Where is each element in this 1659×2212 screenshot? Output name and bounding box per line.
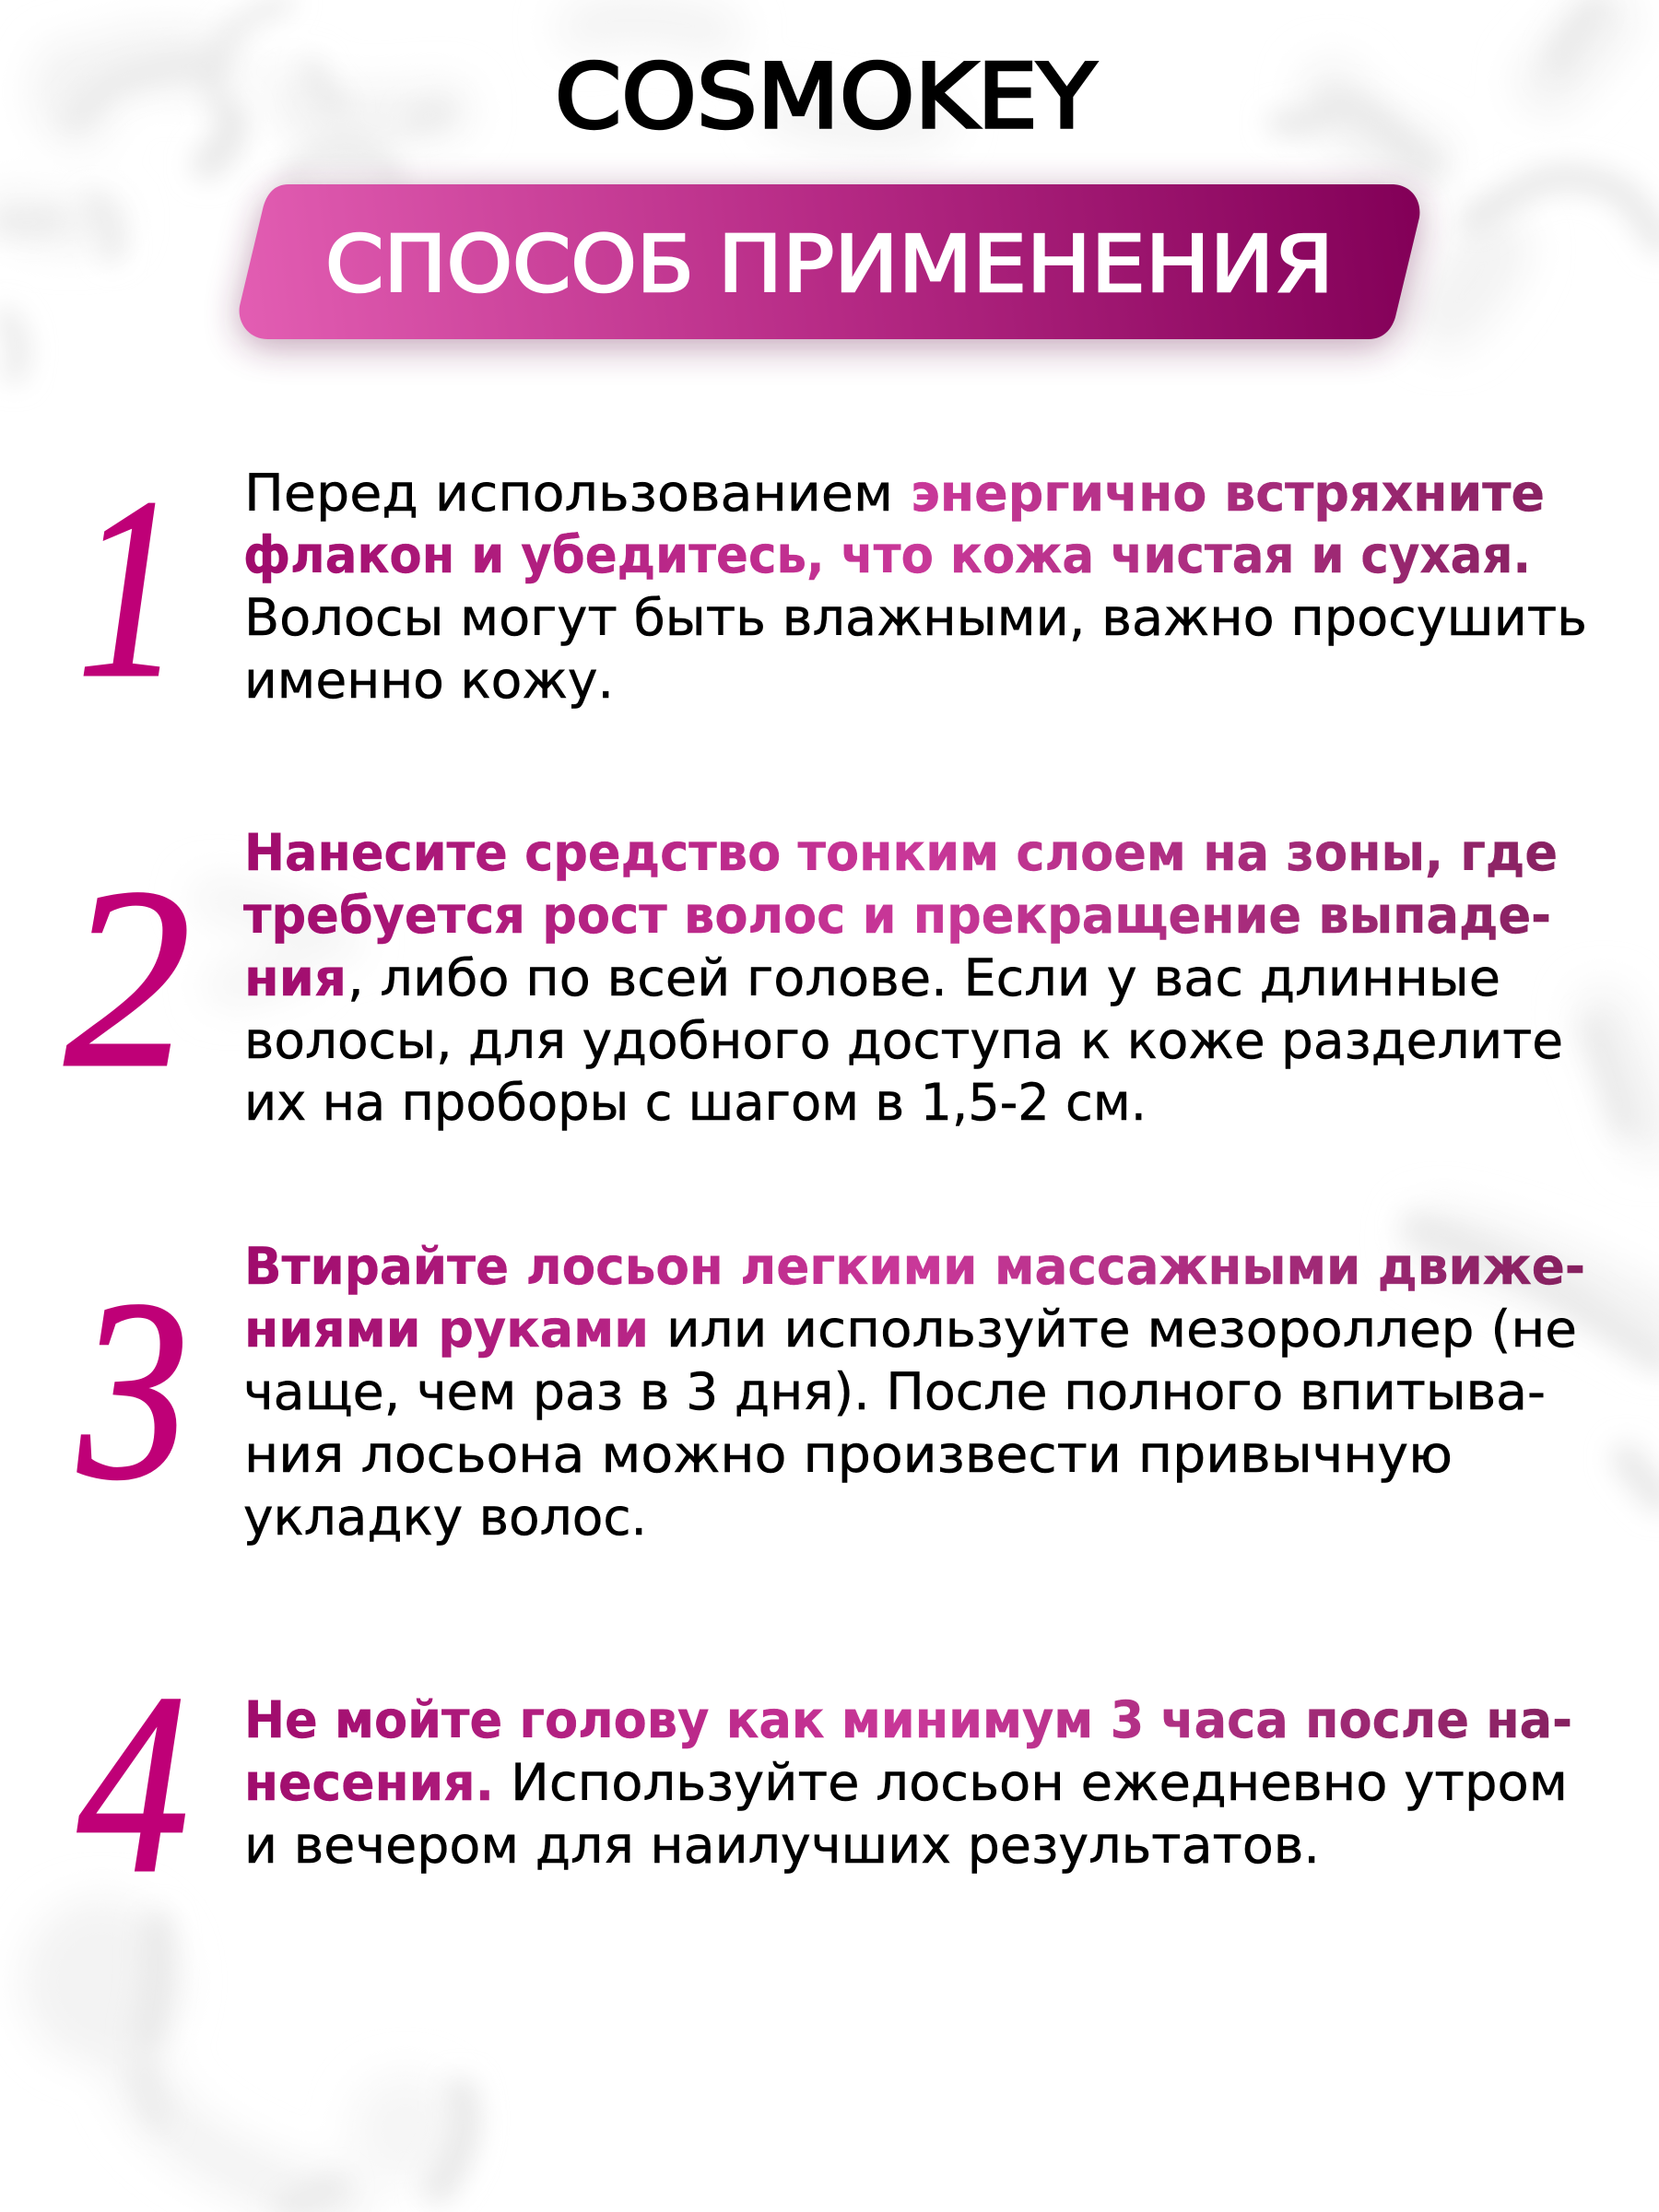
step 3 text xyxy=(243,1237,1585,1547)
step 3 text: Втирайте лосьон легкими массажными движе- xyxy=(244,1237,1585,1296)
step 2 text xyxy=(243,823,1563,1132)
step 3 xyxy=(75,1237,1585,1547)
banner shape xyxy=(240,184,1419,339)
banner text: СПОСОБ xyxy=(325,219,694,311)
step 1 text: энергично встряхните xyxy=(911,464,1545,523)
step 2 text: волосы, для удобного доступа к коже разделите xyxy=(244,1011,1563,1070)
step 3 text: или используйте мезороллер (не xyxy=(666,1300,1577,1359)
step 1 text: именно кожу. xyxy=(244,651,614,710)
number 1: 1 xyxy=(77,444,181,731)
step 1 text: флакон и убедитесь, что кожа чистая и сухая. xyxy=(243,525,1531,584)
step 2 text: Нанесите средство тонким слоем на зоны, где xyxy=(244,823,1558,882)
heading banner xyxy=(240,184,1419,347)
step 4 text xyxy=(244,1690,1572,1875)
step 2 text: требуется рост волос и прекращение выпаде- xyxy=(243,886,1551,945)
step 2 xyxy=(65,823,1563,1132)
step 4 text: Не мойте голову как минимум 3 часа после на- xyxy=(244,1690,1572,1749)
banner shadow xyxy=(240,192,1419,347)
number 2: 2 xyxy=(65,834,191,1121)
step 3 text: ниями руками xyxy=(244,1300,649,1359)
step 3 text: ния лосьона можно произвести привычную xyxy=(244,1425,1453,1484)
step 1 xyxy=(77,444,1587,731)
step 4 text: несения. xyxy=(244,1753,494,1812)
step 4 text: Используйте лосьон ежедневно утром xyxy=(511,1753,1568,1812)
step 1 text: Перед использованием xyxy=(244,464,893,523)
step 2 text: ния xyxy=(244,948,347,1007)
step 3 text: чаще, чем раз в 3 дня). После полного впитыва- xyxy=(243,1362,1546,1421)
step 4 xyxy=(77,1640,1572,1926)
number 4: 4 xyxy=(77,1640,189,1926)
step 4 text: и вечером для наилучших результатов. xyxy=(244,1816,1320,1875)
step 3 text: укладку волос. xyxy=(243,1488,647,1547)
step 1 text: Волосы могут быть влажными, важно просушить xyxy=(244,588,1587,647)
step 2 text: их на проборы с шагом в 1,5-2 см. xyxy=(244,1073,1147,1132)
step 1 text xyxy=(243,464,1587,710)
number 3: 3 xyxy=(75,1246,189,1533)
step 2 text: , либо по всей голове. Если у вас длинные xyxy=(347,948,1500,1007)
banner text: ПРИМЕНЕНИЯ xyxy=(718,219,1334,311)
title: COSMOKEY: COSMOKEY xyxy=(555,45,1096,148)
